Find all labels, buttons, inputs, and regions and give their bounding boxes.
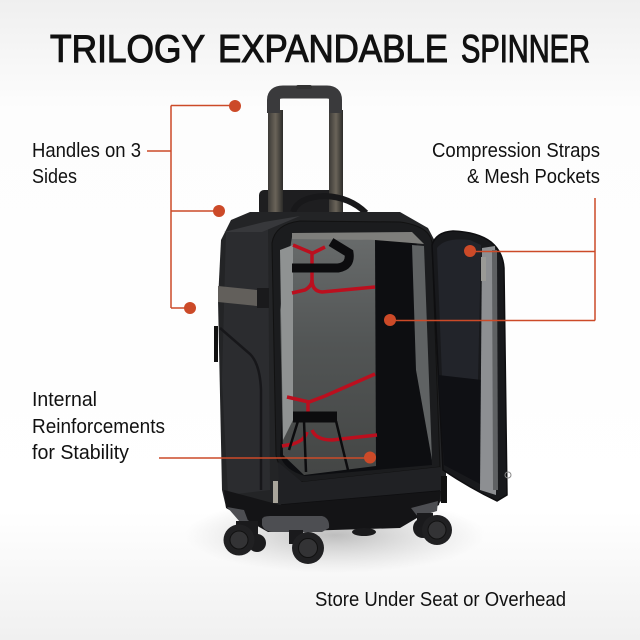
callout: compression straps and mesh pockets [384, 140, 600, 326]
zipper pull [273, 481, 278, 503]
title: TRILOGY [50, 28, 205, 71]
open front door [432, 231, 511, 501]
front bottom panel [278, 462, 443, 505]
callout: internal reinforcements [32, 389, 376, 464]
base [224, 490, 441, 532]
callout: handles on 3 sides [32, 100, 241, 314]
wheels [224, 513, 452, 564]
side grey strap [218, 286, 257, 306]
callout: handles on 3 sides: Sides [32, 166, 77, 188]
interior black compartment [280, 236, 432, 476]
callout: internal reinforcements: for Stability [32, 442, 129, 464]
title: EXPANDABLE [218, 28, 448, 71]
suitcase side and top panel [218, 212, 446, 527]
luggage photo illustration [185, 85, 511, 573]
telescoping handle [259, 85, 343, 222]
caption: store under seat or overhead: Store Under Seat or Overhead [315, 589, 566, 611]
callout: compression straps and mesh pockets: Compression Straps [432, 140, 600, 162]
callout: handles on 3 sides: Handles on 3 [32, 140, 141, 162]
title [50, 28, 590, 71]
callout: compression straps and mesh pockets: & Mesh Pockets [467, 166, 600, 188]
title: SPINNER [461, 28, 590, 71]
side zipper pocket [220, 328, 261, 490]
floor shadow [185, 497, 485, 573]
red straps [282, 245, 377, 446]
callout: internal reinforcements: Reinforcements [32, 416, 165, 438]
front frame [272, 221, 440, 482]
black webbing straps [289, 242, 349, 472]
callout: internal reinforcements: Internal [32, 389, 97, 411]
top carry handle [293, 196, 366, 213]
interior grey lining [280, 237, 376, 475]
